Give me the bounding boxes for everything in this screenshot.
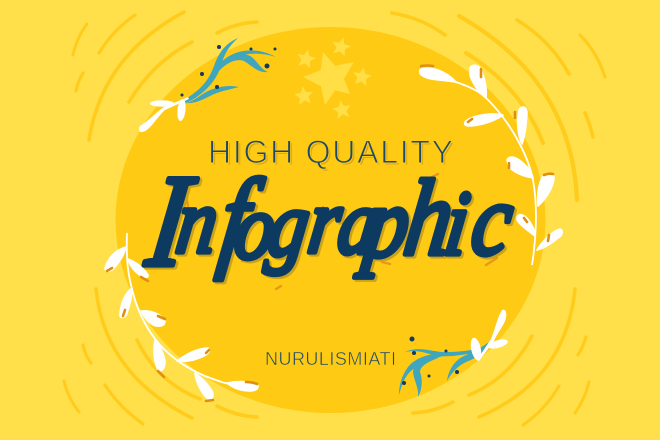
main title: infographic: Infographic bbox=[141, 149, 524, 296]
sprig: bottom right teal bbox=[399, 310, 509, 397]
author name: NURULISMIATI bbox=[265, 349, 396, 369]
main title: infographic: Infographic bbox=[139, 147, 522, 294]
heading: high quality: HIGH QUALITY bbox=[210, 136, 455, 172]
sprig: top left teal bbox=[139, 38, 276, 132]
wreath: right branch bbox=[420, 65, 562, 265]
central sun circle bbox=[116, 27, 546, 413]
title accent dashes bbox=[186, 174, 497, 289]
stars cluster bbox=[293, 35, 373, 120]
heading: high quality: HIGH QUALITY bbox=[208, 134, 453, 170]
wreath: left branch bbox=[105, 233, 258, 401]
radiating arcs bbox=[64, 12, 605, 425]
